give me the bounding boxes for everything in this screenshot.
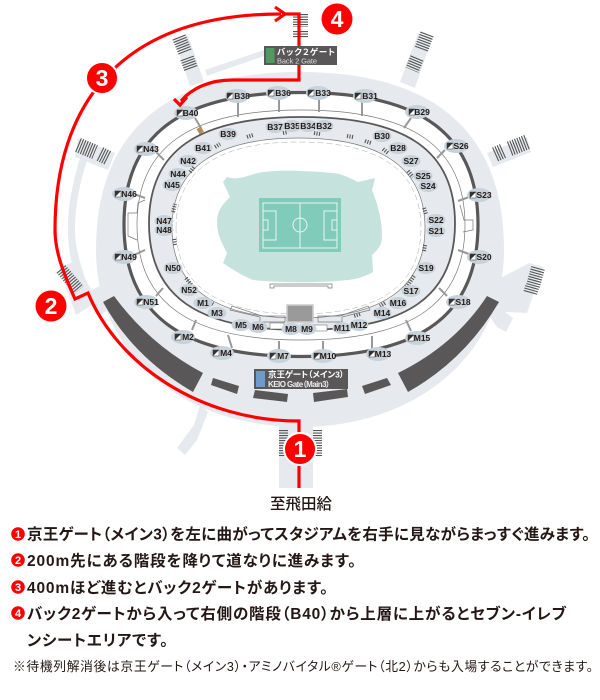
B38 [225,89,250,103]
step 2 text: 2 [15,555,21,567]
S21: S21 [428,226,444,236]
S26: S26 [453,141,469,151]
step 4 text: バック2ゲートから入って右側の階段（B40）から上層に上がるとセブン-イレブ [27,604,567,623]
N48: N48 [156,225,172,235]
M14: M14 [374,308,391,318]
N50 [164,262,182,274]
step marker 1 [284,433,316,465]
N48 [154,224,174,236]
N49 [112,250,137,264]
M1: M1 [197,298,209,308]
S22 [426,214,446,226]
S17 [402,285,420,297]
instructions [11,524,590,650]
bowl dashed edge [176,142,421,314]
S25: S25 [415,171,431,181]
S20 [467,250,492,264]
M6 [248,321,268,333]
gate label: Back 2: バック２ゲート [277,47,335,57]
B32 [314,120,334,132]
N52 [180,284,198,296]
B29 [405,105,430,119]
M1 [194,297,212,309]
gate label: Back 2: Back 2 Gate [277,56,317,66]
M6: M6 [252,322,264,332]
red route [55,7,299,488]
field surround [217,171,382,282]
S23: S23 [476,190,492,200]
B40 [174,106,199,120]
B35 [282,120,302,132]
step marker 4 [322,4,352,34]
B37 [266,121,284,133]
N45 [162,179,182,191]
gate label: Back 2 [264,46,337,66]
N42: N42 [180,156,196,166]
N52: N52 [181,285,197,295]
N46: N46 [121,189,137,199]
M13 [366,347,392,361]
outer dark ring [124,92,478,356]
N45: N45 [164,180,180,190]
M5 [232,319,250,331]
B41: B41 [195,143,211,153]
M15 [405,331,431,345]
B37: B37 [267,122,283,132]
bowl stairs [173,132,426,316]
step marker 2: 2 [45,293,57,319]
N44: N44 [170,169,186,179]
B36: B36 [275,88,291,98]
M13: M13 [375,349,392,359]
B40: B40 [183,108,199,118]
M12: M12 [351,320,368,330]
step marker 2 [36,290,66,322]
N46 [112,187,137,201]
S26 [444,139,469,153]
step 1 text: 1 [15,529,21,541]
S27: S27 [403,156,419,166]
B38: B38 [234,91,250,101]
B36 [266,86,291,100]
bowl bottom structures [230,284,370,331]
step marker 1: 1 [294,436,307,462]
S19: S19 [418,263,434,273]
B31 [353,89,378,103]
step marker 4: 4 [331,6,344,32]
B34: B34 [300,121,316,131]
S24: S24 [420,181,436,191]
M11: M11 [334,323,350,333]
M7 [267,349,291,363]
S18 [446,295,471,309]
M9: M9 [301,324,313,334]
dark blocks along south concourse [103,296,499,402]
step 4 text [11,604,567,650]
B33: B33 [315,88,331,98]
S22: S22 [428,215,444,225]
outer grounds and gate walkways [59,33,543,488]
M8 [282,323,300,335]
B39: B39 [220,129,236,139]
step marker 3: 3 [96,65,108,91]
step 3 text: 3 [15,582,21,594]
M4 [210,346,234,360]
S23 [467,188,492,202]
footnote: ※待機列解消後は京王ゲート（メイン3）・アミノバイタル®ゲート（北2）からも入場することができます。 [13,659,593,674]
N51 [134,295,159,309]
N43 [134,142,159,156]
N43: N43 [143,144,159,154]
M2: M2 [182,332,194,342]
outer section labels [112,86,492,363]
B30: B30 [374,131,390,141]
B28: B28 [390,143,406,153]
M8: M8 [285,324,297,334]
B30 [372,130,392,142]
step 1 text: 京王ゲート（メイン3）を左に曲がってスタジアムを右手に見ながらまっすぐ進みます。 [27,524,590,544]
B33 [306,86,331,100]
B35: B35 [284,121,300,131]
M7: M7 [277,351,289,361]
S25 [414,170,432,182]
B28 [388,142,408,154]
M9 [298,323,316,335]
M4: M4 [220,348,232,358]
N47 [154,215,174,227]
B39 [218,128,238,140]
M15: M15 [414,333,431,343]
B32: B32 [316,121,332,131]
step 4 text: ンシートエリアです。 [27,632,168,650]
M3: M3 [211,308,223,318]
N47: N47 [156,216,172,226]
S20: S20 [476,252,492,262]
gate label: Keio [254,369,348,389]
M5: M5 [235,320,247,330]
brown marker [197,127,204,134]
N51: N51 [143,297,159,307]
S19 [416,262,436,274]
N50: N50 [165,263,181,273]
N49: N49 [121,252,137,262]
step marker 3 [86,62,118,94]
M3 [208,307,226,319]
step 3 text: 400mほど進むとバック2ゲートがあります。 [27,578,328,597]
step 4 text: 4 [15,608,22,620]
gate label: Keio: KEIO Gate（Main3） [268,380,330,389]
B41 [194,142,212,154]
M10 [311,349,337,363]
concourse bumps [128,200,473,240]
inner section labels [154,120,446,335]
step 2 text: 200m先にある階段を降りて道なりに進みます。 [27,552,356,570]
direction caption: 至飛田給 [270,495,332,513]
S24 [418,180,438,192]
thin concourse outline [137,110,465,340]
S21 [426,225,446,237]
N42 [178,155,198,167]
B29: B29 [414,107,430,117]
B31: B31 [362,91,378,101]
stair connectors [134,99,469,350]
M10: M10 [320,351,337,361]
inner dark ring and seating band [149,117,455,330]
gate stairs hatching [61,14,538,456]
B34 [298,120,318,132]
stadium outer concourse band [96,72,504,427]
S17: S17 [403,286,419,296]
inner bowl [172,138,425,318]
soccer pitch [259,198,341,252]
M2 [171,330,195,344]
S27 [402,155,420,167]
gate label: Keio: 京王ゲート（メイン3） [268,370,344,380]
M16: M16 [390,298,407,308]
N44 [168,168,188,180]
S18: S18 [455,297,471,307]
